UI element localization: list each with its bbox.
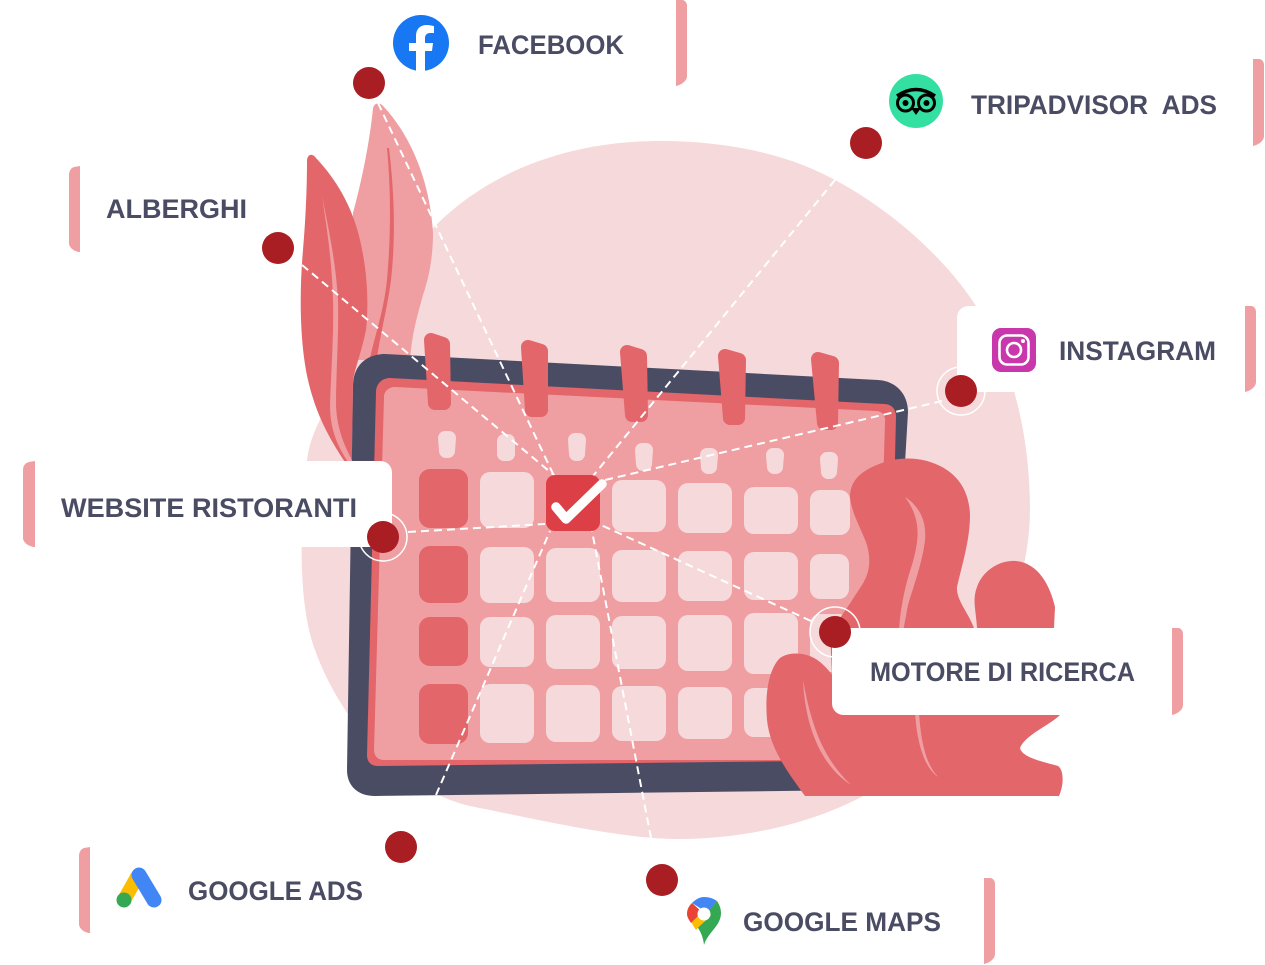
dashed connector lines xyxy=(302,103,942,838)
binding rings xyxy=(431,340,832,423)
label: Instagram: INSTAGRAM xyxy=(1059,336,1216,366)
label: Google Ads xyxy=(79,847,363,933)
date cells: weekend column xyxy=(419,469,468,744)
label: Google Ads: GOOGLE ADS xyxy=(188,876,363,906)
icon: Google Maps xyxy=(687,897,721,945)
label: Tripadvisor Ads: TRIPADVISOR ADS xyxy=(971,90,1217,120)
label: Google Maps: GOOGLE MAPS xyxy=(743,907,941,937)
label: Motore di ricerca xyxy=(832,628,1183,715)
icon: Google Ads xyxy=(116,875,154,908)
icon: Tripadvisor xyxy=(889,74,943,128)
small tabs xyxy=(445,438,831,472)
label: Website Ristoranti: WEBSITE RISTORANTI xyxy=(61,493,357,523)
label: Google Maps xyxy=(687,878,995,964)
foreground leaves xyxy=(766,459,1063,796)
label: Alberghi xyxy=(69,166,247,252)
label: Alberghi: ALBERGHI xyxy=(106,194,247,224)
calendar xyxy=(347,340,908,796)
icon: Facebook xyxy=(393,15,449,71)
date cells xyxy=(480,472,850,743)
label: Website Ristoranti xyxy=(23,461,392,547)
calendar pink page xyxy=(374,387,885,760)
calendar frame xyxy=(347,354,908,796)
back leaf xyxy=(350,103,433,360)
background blob xyxy=(302,141,1030,839)
connector endpoints xyxy=(262,67,985,896)
front leaf xyxy=(301,155,367,465)
label: Facebook xyxy=(393,0,687,86)
accent tab xyxy=(676,0,687,86)
checked date xyxy=(546,475,602,531)
icon: Instagram xyxy=(992,328,1036,372)
label: Instagram xyxy=(957,306,1256,392)
label: Facebook: FACEBOOK xyxy=(478,30,624,60)
label: Tripadvisor Ads xyxy=(889,59,1264,146)
calendar red page xyxy=(367,378,896,766)
label: Motore di ricerca: MOTORE DI RICERCA xyxy=(870,657,1135,687)
